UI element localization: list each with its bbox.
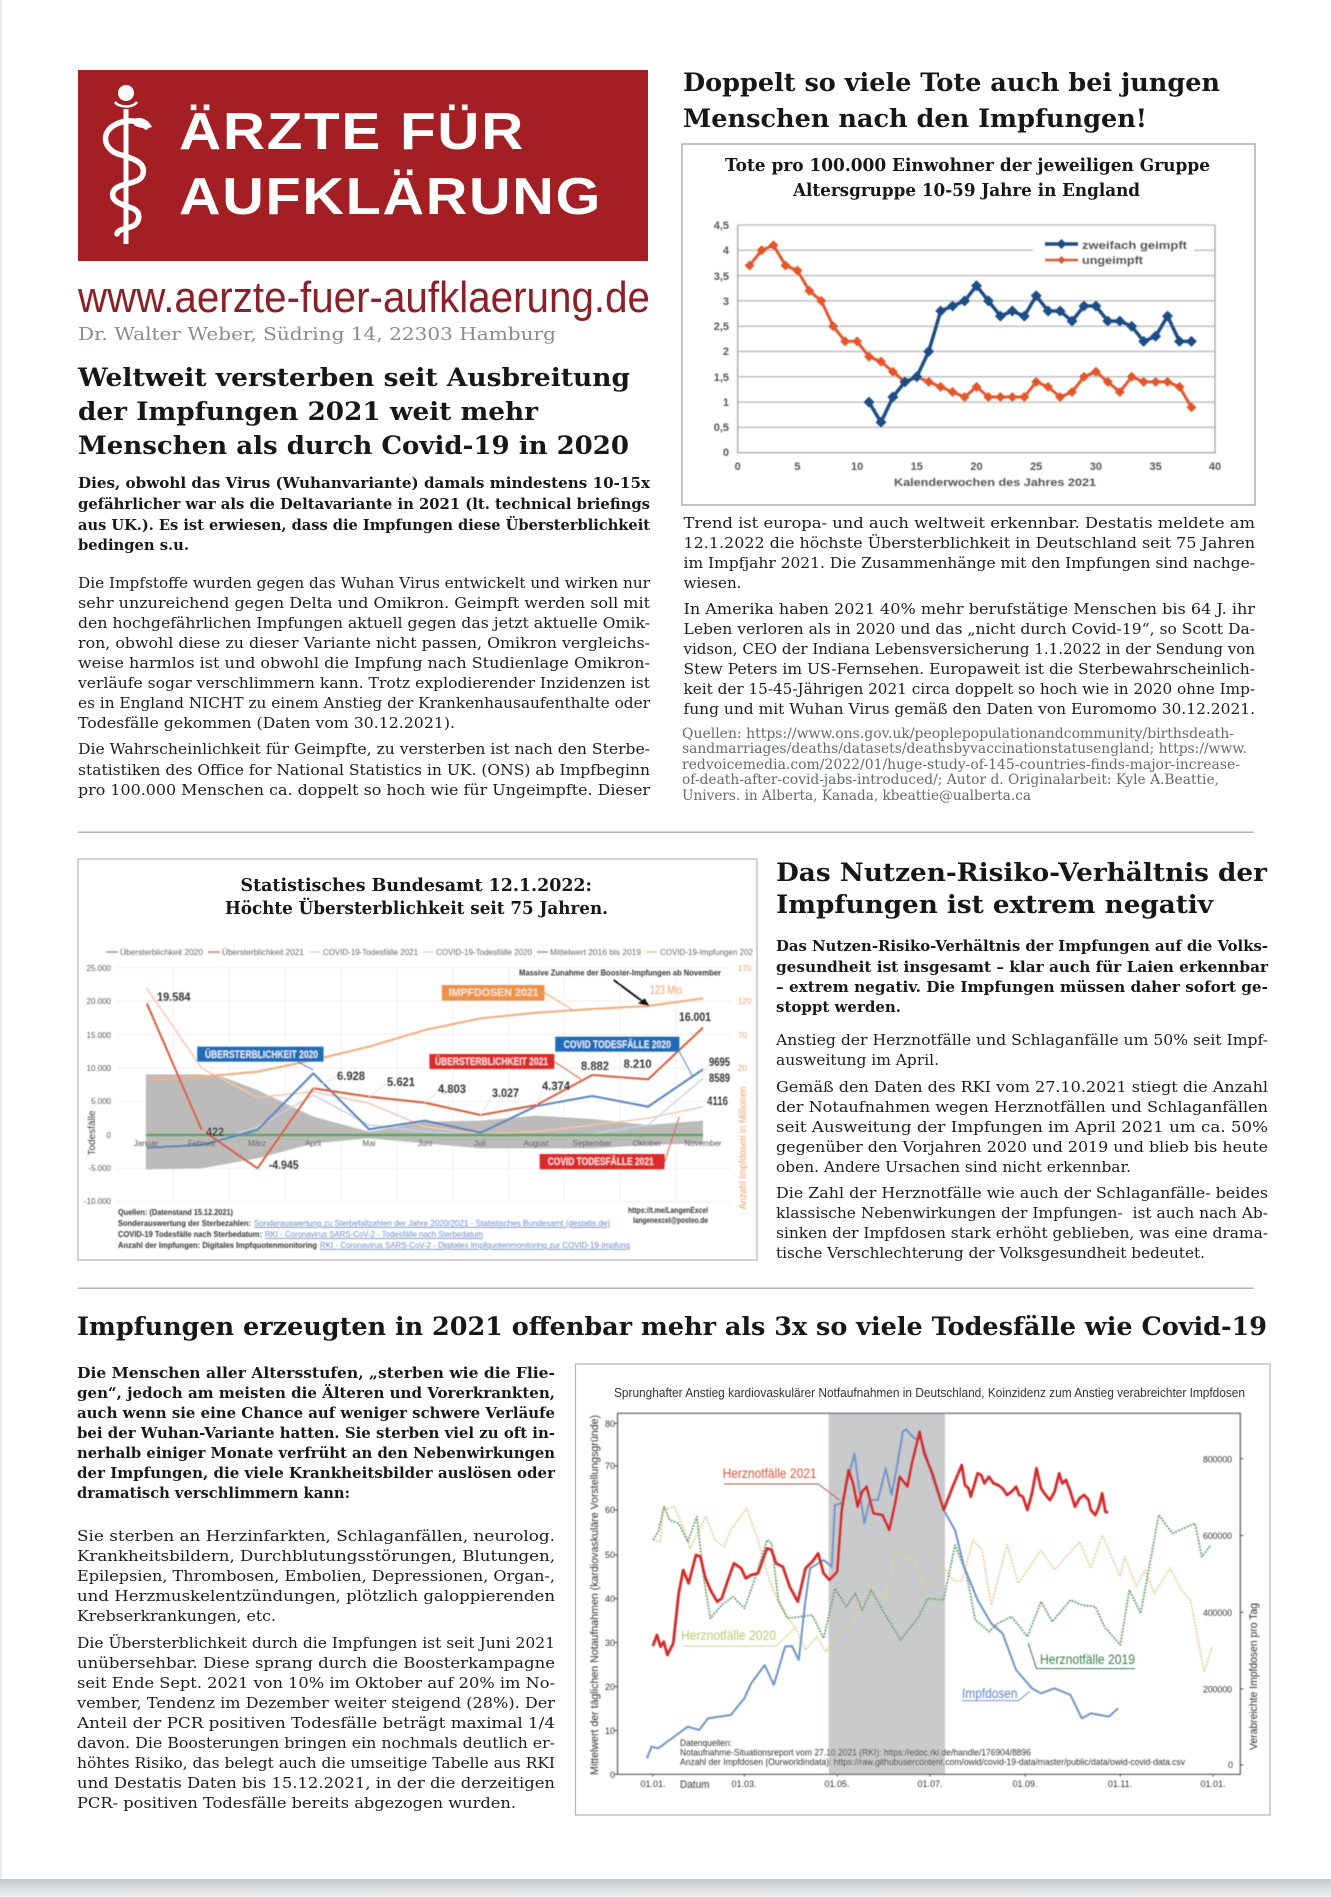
axes labels: Oktober — [633, 1139, 662, 1148]
series labels: Herznotfälle 2019 — [1040, 1651, 1135, 1667]
paragraph: Die Wahrscheinlichkeit: pro 100.000 Menschen ca. doppelt so hoch wie für Ungeimpfte. Dieser — [78, 781, 651, 799]
lead paragraph: Dies, obwohl: bedingen s.u. — [78, 536, 189, 554]
axes labels: 25.000 — [87, 964, 112, 973]
axes labels: Mittelwert der täglichen Notaufnahmen (kardiovaskuläre Vorstellungsgründe) — [589, 1415, 601, 1775]
line chart: 20 — [970, 461, 983, 473]
paragraph: Die Impfstoffe: sehr unzureichend gegen Delta und Omikron. Geimpft werden soll mit — [78, 594, 650, 612]
data sources — [680, 1738, 1185, 1767]
data sources: Notaufnahme-Situationsreport vom 27.10.2021 (RKI): https://edoc.rki.de/handle/176904/8896 — [680, 1748, 1031, 1758]
chart sources: RKI - Coronavirus SARS-CoV-2 - Digitales Impfquotenmonitoring zur COVID-19-Impfung — [320, 1240, 630, 1250]
axes labels: August — [524, 1139, 549, 1148]
axes labels: 01.11. — [1108, 1779, 1132, 1789]
line chart — [589, 1413, 1260, 1791]
lead paragraph: Die Menschen aller Altersstufen: gen“, jedoch am meisten die Älteren und Vorerkrankten, — [77, 1383, 555, 1402]
chart title: Tote pro 100.000 Einwohner der jeweiligen Gruppe — [725, 155, 1210, 176]
line chart: 5 — [794, 461, 800, 473]
paragraph: Die Zahl der Herznotfälle: tische Verschlechterung der Volksgesundheit bedeutet. — [776, 1244, 1205, 1262]
chart title: Altersgruppe 10-59 Jahre in England — [792, 180, 1140, 201]
website url: www.aerzte-fuer-aufklaerung.de — [77, 273, 650, 322]
axes labels: 20.000 — [87, 997, 112, 1006]
line chart: 35 — [1149, 461, 1162, 473]
chart title: Statistisches Bundesamt 12.1.2022: — [240, 875, 592, 896]
paragraph: Die Übersterblichkeit: vember, Tendenz im Dezember weiter steigend (28%). Der — [76, 1694, 556, 1712]
paragraph: Anstieg der Herznotfälle: Anstieg der Herznotfälle und Schlaganfälle um 50% seit Impf- — [775, 1031, 1268, 1049]
paragraph: Die Impfstoffe: weise harmlos ist und obwohl die Impfung nach Studienlage Omikron- — [78, 654, 650, 672]
lead paragraph: Die Menschen aller Altersstufen: bei der Wuhan-Variante hatten. Sie sterben viel zu oft in- — [77, 1424, 555, 1442]
paragraph: In Amerika: Leben verloren als in 2020 und das „nicht durch Covid-19“, so Scott Da- — [684, 620, 1255, 638]
series labels: Herznotfälle 2021 — [723, 1465, 817, 1481]
callouts: IMPFDOSEN 2021 — [449, 987, 539, 999]
data labels: 8.882 — [581, 1059, 609, 1073]
paragraph: Die Impfstoffe: Todesfälle gekommen (Daten vom 30.12.2021). — [78, 714, 455, 732]
line chart: 3,5 — [714, 271, 729, 283]
axes labels: 600000 — [1203, 1531, 1232, 1541]
axes labels: 170 — [738, 964, 752, 973]
series labels: Impfdosen — [962, 1685, 1018, 1701]
paragraph: Sie sterben an: Epilepsien, Thrombosen, Embolien, Depressionen, Organ-, — [77, 1567, 555, 1585]
lead paragraph: Dies, obwohl: aus UK.). Es ist erwiesen, dass die Impfungen diese Übersterblichkeit — [78, 515, 650, 534]
paragraph: Trend ist europa: 12.1.2022 die höchste Übersterblichkeit in Deutschland seit 75 Jahren — [684, 534, 1255, 552]
lead paragraph: Dies, obwohl — [78, 474, 651, 554]
paragraph: Die Übersterblichkeit — [76, 1634, 556, 1812]
data labels: 4.803 — [438, 1082, 466, 1096]
lead paragraph: Die Menschen aller Altersstufen — [77, 1364, 556, 1502]
heading: Impfungen erzeugten: Impfungen erzeugten in 2021 offenbar mehr als 3x so viele Todesfälle wie Covid-19 — [77, 1312, 1267, 1341]
axes labels: 70 — [605, 1461, 615, 1471]
paragraph: Gemäß den Daten: gegenüber den Vorjahren 2020 und 2019 und blieb bis heute — [776, 1138, 1268, 1156]
data labels: 8589 — [709, 1071, 730, 1085]
lead paragraph: Die Menschen aller Altersstufen: nerhalb einiger Monate verfrüht an den Nebenwirkungen — [77, 1444, 555, 1462]
axes labels: 0 — [107, 1131, 112, 1140]
lead paragraph: Die Menschen aller Altersstufen: der Impfungen, die viele Krankheitsbilder auslösen oder — [77, 1464, 556, 1482]
paragraph: Die Wahrscheinlichkeit — [78, 740, 651, 799]
axes labels: 01.05. — [824, 1779, 850, 1789]
chart sources: Sonderauswertung der Sterbezahlen: — [118, 1218, 251, 1228]
axes labels: 01.01. — [640, 1779, 666, 1789]
lead paragraph: Das Nutzen-Risiko-Verhältnis: Das Nutzen-Risiko-Verhältnis der Impfungen auf die Volks- — [776, 937, 1268, 955]
heading: Doppelt so viele Tote: Menschen nach den Impfungen! — [683, 104, 1147, 133]
axes labels: -10.000 — [84, 1197, 112, 1206]
chart legend: ungeimpft — [1082, 255, 1143, 267]
paragraph: Die Zahl der Herznotfälle: sinken der Impfdosen stark erhöht geblieben, was eine drama- — [776, 1224, 1268, 1242]
lead paragraph: Dies, obwohl: Dies, obwohl das Virus (Wuhanvariante) damals mindestens 10-15x — [78, 474, 651, 492]
lead paragraph: Die Menschen aller Altersstufen: auch wenn sie eine Chance auf weniger schwere Verläufe — [77, 1404, 555, 1422]
lead paragraph: Die Menschen aller Altersstufen: Die Menschen aller Altersstufen, „sterben wie die Flie- — [77, 1364, 555, 1382]
data labels: 5.621 — [387, 1075, 415, 1089]
series labels — [681, 1465, 1135, 1701]
axes labels: 01.03. — [731, 1779, 757, 1789]
chart title: Höchte Übersterblichkeit seit 75 Jahren. — [225, 896, 608, 919]
data labels: 8.210 — [624, 1057, 652, 1071]
heading: Weltweit versterben: Weltweit versterben seit Ausbreitung — [77, 363, 630, 392]
paragraph: Die Impfstoffe — [77, 574, 651, 732]
chart sources: https://t.me/LangenExcel — [628, 1205, 708, 1215]
lead paragraph: Das Nutzen-Risiko-Verhältnis: – extrem negativ. Die Impfungen müssen daher sofort ge- — [776, 978, 1268, 996]
paragraph: Die Wahrscheinlichkeit: Die Wahrscheinlichkeit für Geimpfte, zu versterben ist nach den Sterbe- — [78, 740, 650, 758]
heading: Nutzen-Risiko: Das Nutzen-Risiko-Verhältnis der — [776, 858, 1268, 887]
series labels: Herznotfälle 2020 — [681, 1627, 776, 1643]
paragraph: Die Impfstoffe: ron, obwohl diese zu dieser Variante nicht passen, Omikron vergleichs- — [78, 634, 650, 652]
paragraph: Die Impfstoffe: Die Impfstoffe wurden gegen das Wuhan Virus entwickelt und wirken nur — [78, 574, 651, 592]
paragraph: Die Zahl der Herznotfälle: klassische Nebenwirkungen der Impfungen- ist auch nach Ab- — [776, 1204, 1268, 1222]
axes labels: 80 — [605, 1419, 615, 1429]
paragraph: Die Impfstoffe: den hochgefährlichen Impfungen aktuell gegen das jetzt aktuelle Omik- — [78, 614, 650, 632]
panel: line chart deaths per 100,000 — [682, 144, 1255, 505]
address: Dr. Walter Weber, Südring 14, 22303 Hamburg — [78, 324, 556, 345]
chart sources: COVID-19 Todesfälle nach Sterbedatum: — [118, 1229, 262, 1239]
heading: Doppelt so viele Tote: Doppelt so viele Tote auch bei jungen — [683, 68, 1220, 97]
sources text: of-death-after-covid-jabs-introduced/; Autor d. Originalarbeit: Kyle A.Beattie, — [682, 772, 1219, 788]
line chart: 10 — [851, 461, 863, 473]
excess mortality line chart — [84, 947, 753, 1250]
paragraph: In Amerika: Stew Peters im US-Fernsehen. Europaweit ist die Sterbewahrscheinlich- — [684, 660, 1255, 678]
axes labels: 40 — [605, 1594, 615, 1604]
axes labels: November — [685, 1139, 722, 1148]
paragraph: Die Übersterblichkeit: davon. Die Boosterungen bringen ein nochmals deutlich er- — [77, 1734, 555, 1752]
data labels: 19.584 — [157, 990, 191, 1004]
paragraph: Gemäß den Daten: der Notaufnahmen wegen Herznotfällen und Schlaganfällen — [776, 1098, 1268, 1116]
axes labels: 20 — [605, 1682, 615, 1692]
axes labels: -5.000 — [88, 1164, 112, 1173]
heading: Weltweit versterben — [77, 363, 630, 460]
axes labels: Mai — [363, 1139, 376, 1148]
paragraph: Sie sterben an: Krebserkrankungen, etc. — [77, 1607, 276, 1625]
callouts: ÜBERSTERBLICHKEIT 2020 — [205, 1048, 318, 1061]
data labels — [157, 968, 730, 1172]
paragraph: Trend ist europa: Trend ist europa- und auch weltweit erkennbar. Destatis meldete am — [684, 514, 1255, 532]
heading: Weltweit versterben: der Impfungen 2021 weit mehr — [78, 397, 539, 426]
line chart: 40 — [1209, 461, 1221, 473]
line chart: 3 — [723, 296, 729, 308]
axes labels: 0 — [1228, 1760, 1233, 1770]
chart title — [225, 875, 608, 919]
lead paragraph: Das Nutzen-Risiko-Verhältnis — [776, 937, 1269, 1016]
line chart: 0 — [735, 461, 741, 473]
axes labels: Todesfälle — [87, 1110, 98, 1156]
line chart: 1,5 — [714, 372, 729, 384]
chart legend: COVID-19-Todesfälle 2021 — [323, 947, 418, 957]
axes labels: 50 — [605, 1550, 615, 1560]
axes labels: 01.01. — [1200, 1779, 1226, 1789]
axes labels: 120 — [738, 997, 752, 1006]
logo banner: Ärzte für Aufklärung — [78, 70, 648, 261]
axes labels: 800000 — [1203, 1454, 1232, 1464]
icon: rod of Asclepius — [106, 85, 152, 244]
axes labels: Verabreichte Impfdosen pro Tag — [1248, 1603, 1260, 1750]
paragraph: Anstieg der Herznotfälle: ausweitung im April. — [776, 1051, 939, 1069]
paragraph: Sie sterben an: Sie sterben an Herzinfarkten, Schlaganfällen, neurolog. — [77, 1527, 555, 1545]
line chart: 25 — [1030, 461, 1042, 473]
sources text: sandmarriages/deaths/datasets/deathsbyvaccinationstatusengland; https://www. — [682, 741, 1247, 757]
paragraph: In Amerika — [682, 600, 1256, 718]
axes labels: 200000 — [1203, 1684, 1232, 1694]
data sources: Anzahl der Impfdosen (Ourworldindata): https://raw.githubusercontent.com/owid/covid-19-data/master/public/data/owid-covid-data.csv — [680, 1757, 1185, 1767]
chart sources: Quellen: (Datenstand 15.12.2021) — [118, 1207, 233, 1217]
lead paragraph: Die Menschen aller Altersstufen: dramatisch verschlimmern kann: — [77, 1484, 350, 1502]
paragraph: Gemäß den Daten: seit Ausweitung der Impfungen im April 2021 um ca. 50% — [776, 1118, 1268, 1136]
data labels: 9695 — [709, 1055, 730, 1069]
heading: Nutzen-Risiko: Impfungen ist extrem negativ — [776, 890, 1215, 919]
chart sources: langenexcel@posteo.de — [633, 1215, 708, 1225]
paragraph: In Amerika: vidson, CEO der Indiana Lebensversicherung 1.1.2022 in der Sendung von — [682, 640, 1255, 658]
axes labels: 01.07. — [917, 1779, 943, 1789]
line chart: Kalenderwochen des Jahres 2021 — [894, 477, 1096, 489]
sources text: Quellen: https://www.ons.gov.uk/peoplepopulationandcommunity/birthsdeath- — [682, 726, 1234, 742]
axes labels: 10.000 — [87, 1064, 112, 1073]
chart title — [725, 155, 1210, 201]
axes labels: Juni — [418, 1139, 433, 1148]
paragraph: Trend ist europa: wiesen. — [684, 574, 742, 592]
paragraph: Die Übersterblichkeit: Die Übersterblichkeit durch die Impfungen ist seit Juni 2021 — [77, 1634, 555, 1652]
axes labels: 15.000 — [87, 1031, 112, 1040]
callouts: COVID TODESFÄLLE 2021 — [548, 1155, 654, 1168]
callouts — [205, 987, 671, 1168]
paragraph: In Amerika: In Amerika haben 2021 40% mehr berufstätige Menschen bis 64 J. ihr — [684, 600, 1256, 618]
paragraph: In Amerika: keit der 15-45-Jährigen 2021 circa doppelt so hoch wie in 2020 ohne Imp- — [684, 680, 1255, 698]
axes labels — [589, 1415, 1260, 1791]
line chart: 2,5 — [714, 321, 729, 333]
chart sources — [118, 1205, 708, 1250]
axes labels: Februar — [188, 1139, 216, 1148]
chart sources: RKI - Coronavirus SARS-CoV-2 - Todesfälle nach Sterbedatum — [265, 1229, 483, 1239]
paragraph: Die Impfstoffe: verläufe sogar verschlimmern kann. Trotz explodierender Inzidenzen ist — [77, 674, 650, 692]
paragraph: Die Zahl der Herznotfälle — [776, 1184, 1268, 1262]
heading: Weltweit versterben: Menschen als durch Covid-19 in 2020 — [78, 431, 629, 460]
axes labels: Juli — [474, 1139, 486, 1148]
line chart — [714, 220, 1221, 489]
data labels: 16.001 — [679, 1010, 711, 1024]
logo text: AUFKLÄRUNG — [179, 168, 602, 226]
paragraph: Gemäß den Daten — [776, 1078, 1268, 1176]
paragraph: Anstieg der Herznotfälle — [775, 1031, 1268, 1069]
paragraph: Trend ist europa: im Impfjahr 2021. Die Zusammenhänge mit den Impfungen sind nachge- — [684, 554, 1255, 572]
chart legend: COVID-19-Todesfälle 2020 — [436, 947, 532, 957]
data labels: Massive Zunahme der Booster-Impfungen ab November — [519, 968, 722, 978]
axes labels: 70 — [738, 1031, 747, 1040]
line chart: 4,5 — [714, 220, 729, 232]
chart sources: Anzahl der Impfungen: Digitales Impfquotenmonitoring — [118, 1240, 317, 1250]
paragraph: Trend ist europa — [684, 514, 1255, 592]
axes labels: 30 — [605, 1638, 615, 1648]
paragraph: Die Übersterblichkeit: und Destatis Daten bis 15.12.2021, in der die derzeitigen — [77, 1774, 555, 1792]
chart legend: Übersterblichkeit 2020 — [120, 947, 203, 957]
axes labels: Anzahl Impfdosen in Millionen — [738, 1086, 749, 1210]
axes labels: 60 — [605, 1505, 615, 1515]
logo text — [179, 103, 602, 226]
axes labels: 01.09. — [1012, 1779, 1038, 1789]
paragraph: Die Zahl der Herznotfälle: Die Zahl der Herznotfälle wie auch der Schlaganfälle- beides — [776, 1184, 1268, 1202]
paragraph: Die Impfstoffe: es in England NICHT zu einem Anstieg der Krankenhausaufenthalte oder — [78, 694, 651, 712]
chart sources: Sonderauswertung zu Sterbefallzahlen der Jahre 2020/2021 - Statistisches Bundesamt (destatis.de) — [254, 1218, 610, 1228]
lead paragraph: Das Nutzen-Risiko-Verhältnis: gesundheit ist insgesamt – klar auch für Laien erkennbar — [776, 958, 1269, 976]
axes labels: Januar — [134, 1139, 159, 1148]
line chart: 2 — [723, 346, 729, 358]
sources text: redvoicemedia.com/2022/01/huge-study-of-145-countries-finds-major-increase- — [682, 757, 1240, 773]
axes labels: 5.000 — [91, 1097, 112, 1106]
panel: cardiovascular emergency chart — [576, 1364, 1270, 1815]
paragraph: Die Übersterblichkeit: Anteil der PCR positiven Todesfälle beträgt maximal 1/4 — [76, 1714, 555, 1732]
chart legend: Mittelwert 2016 bis 2019 — [550, 947, 641, 957]
data labels: 123 Mio — [650, 983, 682, 997]
chart legend — [106, 947, 753, 957]
line chart: 30 — [1090, 461, 1102, 473]
paragraph: In Amerika: fung und mit Wuhan Virus gemäß den Daten von Euromomo 30.12.2021. — [684, 700, 1255, 718]
data labels: -4.945 — [269, 1158, 299, 1172]
axes labels: 0 — [610, 1770, 615, 1780]
paragraph: Die Übersterblichkeit: unübersehbar. Diese sprang durch die Boosterkampagne — [77, 1654, 555, 1672]
paragraph: Gemäß den Daten: Gemäß den Daten des RKI vom 27.10.2021 stiegt die Anzahl — [776, 1078, 1268, 1096]
paragraph: Die Übersterblichkeit: seit Ende Sept. 2021 von 10% im Oktober auf 20% im No- — [77, 1674, 555, 1692]
paragraph: Gemäß den Daten: oben. Andere Ursachen sind nicht erkennbar. — [776, 1158, 1131, 1176]
data sources: Datenquellen: — [680, 1738, 732, 1748]
chart legend: COVID-19-Impfungen 202 — [660, 947, 753, 957]
chart title: Sprunghafter Anstieg kardiovaskulärer Notfaufnahmen in Deutschland, Koinzidenz zum Anstieg verabreichter Impfdosen — [614, 1386, 1245, 1400]
data labels: 3.027 — [492, 1086, 519, 1100]
line chart: 15 — [911, 461, 923, 473]
chart legend: Übersterblichkeit 2021 — [222, 947, 304, 957]
panel: Statistisches Bundesamt chart — [78, 859, 757, 1260]
data labels: 6.928 — [337, 1069, 365, 1083]
line chart: 0 — [723, 447, 729, 459]
axes labels: September — [572, 1139, 612, 1148]
lead paragraph: Das Nutzen-Risiko-Verhältnis: stoppt werden. — [776, 998, 901, 1016]
data labels: 422 — [206, 1125, 224, 1139]
sources text: Univers. in Alberta, Kanada, kbeattie@ualberta.ca — [682, 788, 1031, 804]
line chart: 1 — [723, 397, 729, 409]
callouts: ÜBERSTERBLICHKEIT 2021 — [435, 1055, 548, 1068]
lead paragraph: Dies, obwohl: gefährlicher war als die Deltavariante in 2021 (lt. technical briefings — [78, 495, 650, 513]
paragraph: Sie sterben an: und Herzmuskelentzündungen, plötzlich galoppierenden — [77, 1587, 555, 1605]
axes labels — [84, 964, 752, 1210]
heading: Doppelt so viele Tote — [683, 68, 1220, 133]
axes labels: 10 — [605, 1726, 615, 1736]
axes labels: März — [248, 1139, 266, 1148]
callouts: COVID TODESFÄLLE 2020 — [564, 1038, 671, 1051]
heading: Nutzen-Risiko — [776, 858, 1268, 919]
axes labels: Datum — [680, 1779, 710, 1791]
paragraph: Die Übersterblichkeit: höhtes Risiko, das belegt auch die umseitige Tabelle aus RKI — [77, 1754, 555, 1772]
chart legend — [1045, 239, 1187, 267]
data labels: 4.374 — [542, 1079, 570, 1093]
line chart: 4 — [723, 245, 730, 257]
paragraph: Sie sterben an — [77, 1527, 555, 1625]
sources text — [682, 726, 1247, 804]
axes labels: April — [305, 1139, 321, 1148]
axes labels: 400000 — [1203, 1608, 1232, 1618]
axes labels: 20 — [738, 1064, 747, 1073]
paragraph: Die Wahrscheinlichkeit: statistiken des Office for National Statistics in UK. (ONS) ab Impfbeginn — [78, 761, 650, 779]
data labels: 4116 — [707, 1094, 728, 1108]
line chart: 0,5 — [714, 422, 729, 434]
logo text: ÄRZTE FÜR — [179, 103, 525, 161]
chart legend: zweifach geimpft — [1082, 240, 1187, 252]
paragraph: Die Übersterblichkeit: PCR- positiven Todesfälle bereits abgezogen wurden. — [77, 1794, 516, 1812]
paragraph: Sie sterben an: Krankheitsbildern, Durchblutungsstörungen, Blutungen, — [77, 1547, 555, 1565]
